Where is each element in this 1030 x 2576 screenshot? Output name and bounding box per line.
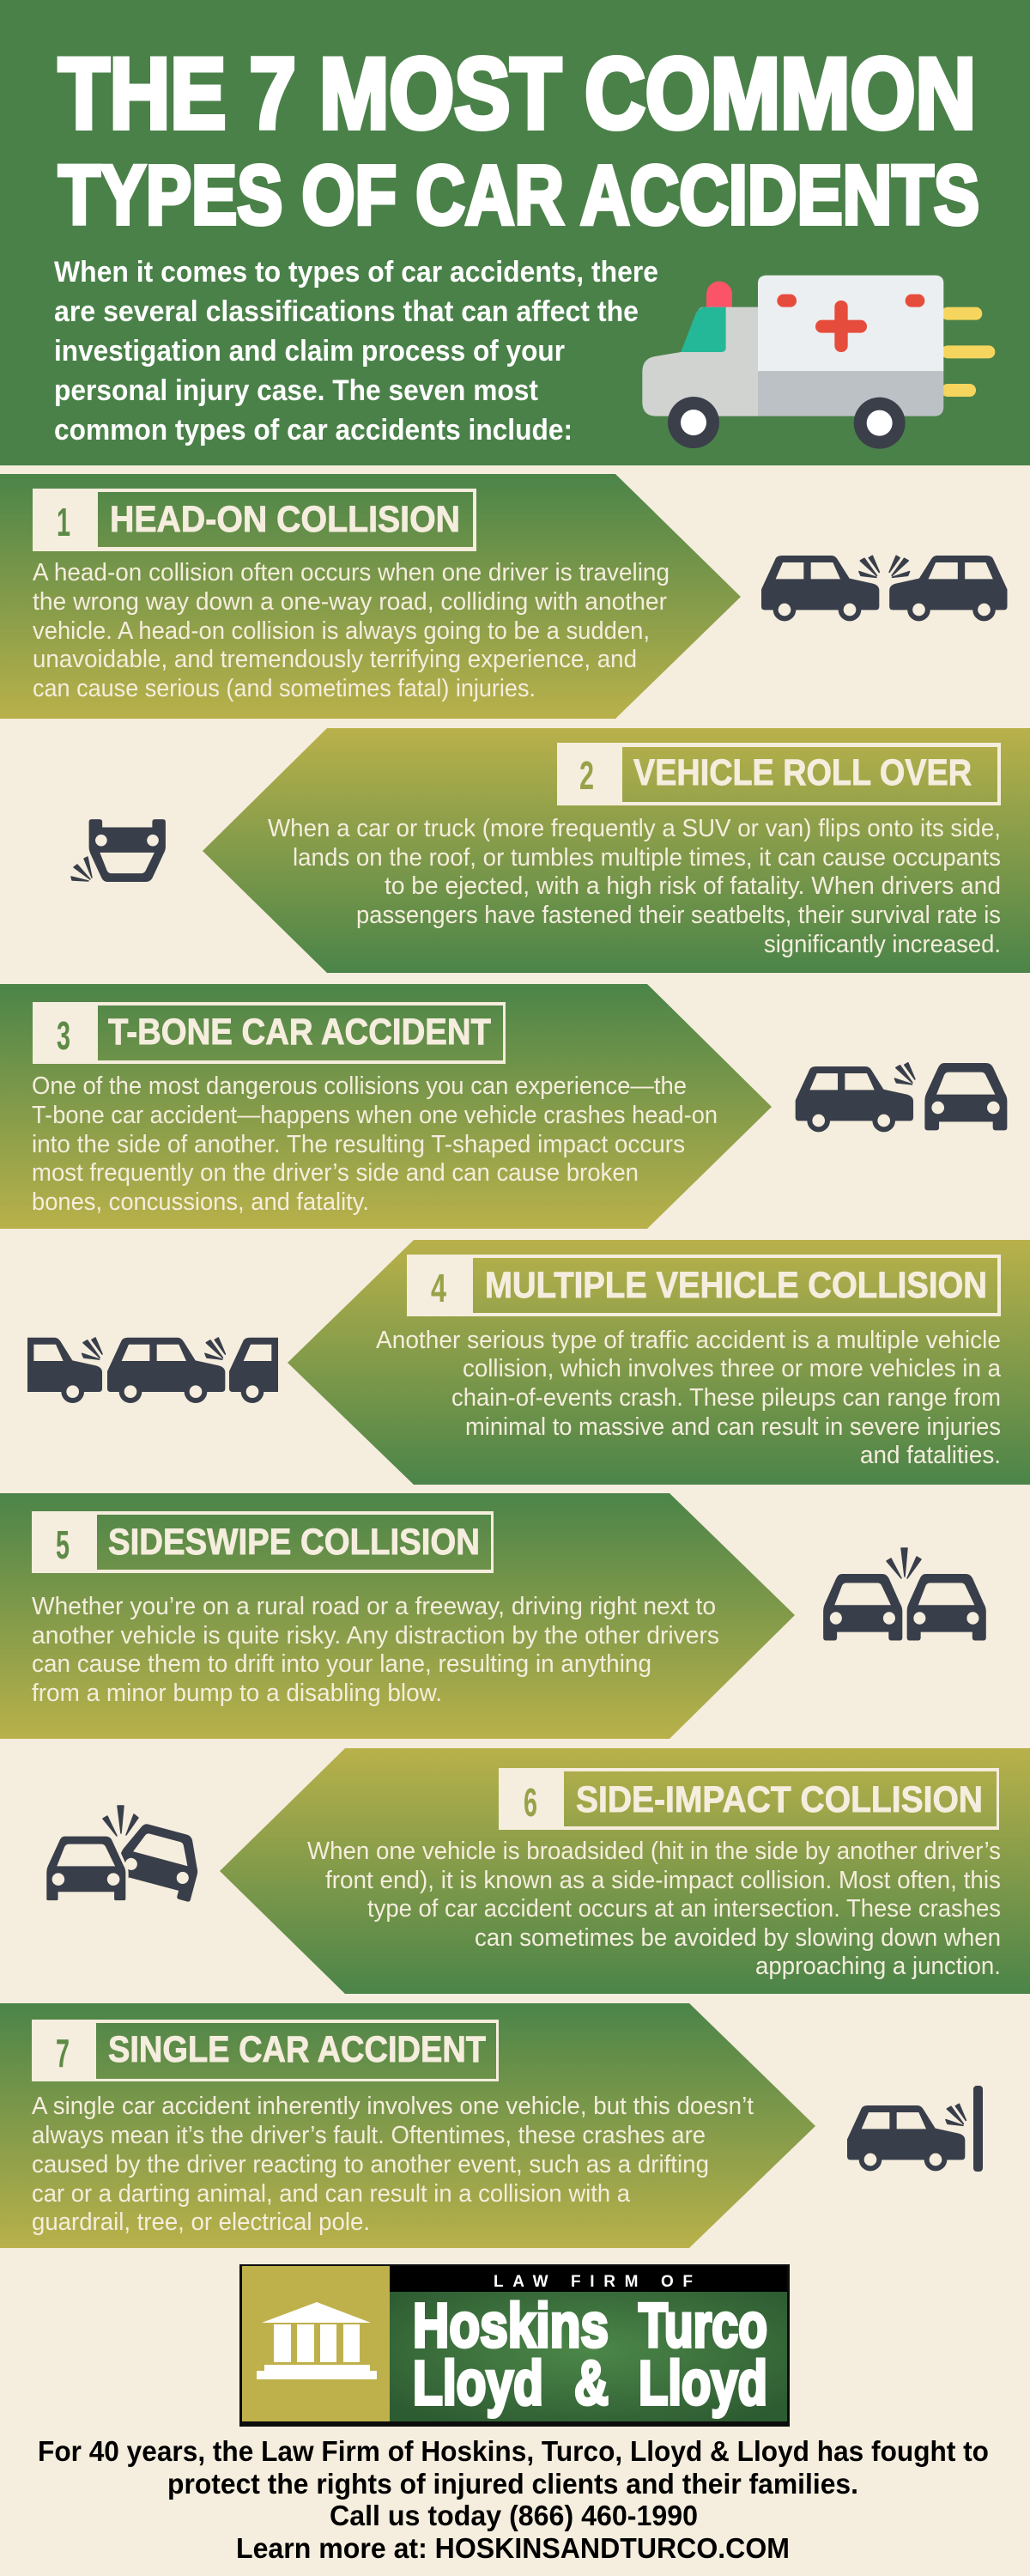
heading box 3 — [33, 1002, 506, 1064]
law firm logo — [239, 2264, 790, 2427]
heading box 5: 5 — [56, 1522, 70, 1567]
intro text: common types of car accidents include: — [54, 414, 573, 447]
heading box 1: 1 — [57, 500, 70, 544]
heading box 1: HEAD-ON COLLISION — [110, 499, 460, 540]
body text 5: Whether you’re on a rural road or a freeway, driving right next to — [32, 1593, 716, 1620]
heading box 5: SIDESWIPE COLLISION — [108, 1522, 480, 1563]
body text 7: car or a darting animal, and can result in a collision with a — [32, 2180, 630, 2208]
footer text: For 40 years, the Law Firm of Hoskins, Turco, Lloyd & Lloyd has fought to — [38, 2435, 989, 2467]
panel 6: side-impact collision — [220, 1748, 1030, 1994]
body text 4 — [376, 1327, 1001, 1469]
logo text: LAW FIRM OF — [494, 2273, 693, 2291]
heading box 3: 3 — [57, 1013, 70, 1058]
footer text: Call us today (866) 460-1990 — [330, 2500, 698, 2531]
body text 5: can cause them to drift into your lane, resulting in anything — [32, 1650, 651, 1678]
body text 3: T-bone car accident—happens when one vehicle crashes head-on — [32, 1102, 718, 1129]
heading box 6: SIDE-IMPACT COLLISION — [576, 1779, 983, 1820]
icon: multi-car pileup — [27, 1337, 278, 1403]
logo text: Hoskins — [413, 2292, 609, 2360]
body text 2 — [268, 815, 1001, 958]
heading box 1 — [33, 489, 476, 551]
panel 3: t-bone car accident — [0, 984, 772, 1229]
logo text — [413, 2273, 767, 2418]
body text 2: passengers have fastened their seatbelts, their survival rate is — [356, 902, 1001, 929]
intro text: When it comes to types of car accidents, there — [54, 256, 658, 289]
body text 4: and fatalities. — [860, 1442, 1001, 1469]
icon: side-impact cars — [45, 1806, 207, 1902]
body text 6: type of car accident occurs at an intersection. These crashes — [367, 1895, 1001, 1923]
footer text: Learn more at: HOSKINSANDTURCO.COM — [236, 2532, 790, 2564]
logo text: Lloyd — [413, 2349, 543, 2418]
logo text: Turco — [639, 2292, 767, 2360]
icon: courthouse pillars — [257, 2302, 377, 2379]
body text 1: unavoidable, and tremendously terrifying experience, and — [33, 646, 637, 673]
body text 6: When one vehicle is broadsided (hit in the side by another driver’s — [307, 1838, 1001, 1865]
body text 3: into the side of another. The resulting T-shaped impact occurs — [32, 1131, 685, 1158]
body text 4: collision, which involves three or more vehicles in a — [463, 1355, 1001, 1382]
body text 3: most frequently on the driver’s side and can cause broken — [32, 1159, 639, 1187]
logo text: Lloyd — [639, 2349, 767, 2418]
body text 7: always mean it’s the driver’s fault. Oftentimes, these crashes are — [32, 2122, 706, 2149]
body text 5 — [32, 1593, 719, 1707]
body text 7: guardrail, tree, or electrical pole. — [32, 2208, 370, 2236]
body text 1: vehicle. A head-on collision is always going to be a sudden, — [33, 617, 650, 645]
panel 7: single car accident — [0, 2003, 815, 2248]
icon: ambulance — [642, 276, 995, 449]
footer text: protect the rights of injured clients and their families. — [167, 2468, 858, 2500]
heading box 3: T-BONE CAR ACCIDENT — [108, 1012, 491, 1053]
heading box 4 — [407, 1255, 1001, 1316]
body text 7: A single car accident inherently involves one vehicle, but this doesn’t — [32, 2093, 754, 2120]
body text 6: can sometimes be avoided by slowing down when — [475, 1924, 1001, 1952]
icon: sideswiping cars — [823, 1548, 986, 1641]
body text 3 — [32, 1072, 718, 1216]
body text 1: can cause serious (and sometimes fatal) injuries. — [33, 675, 536, 702]
body text 6: front end), it is known as a side-impact collision. Most often, this — [325, 1867, 1001, 1894]
heading box 7 — [32, 2020, 499, 2081]
heading box 6: 6 — [524, 1780, 537, 1825]
heading box 5 — [32, 1511, 494, 1573]
intro text: personal injury case. The seven most — [54, 374, 538, 407]
panel 1: head-on collision — [0, 474, 741, 719]
body text 2: to be ejected, with a high risk of fatality. When drivers and — [385, 872, 1001, 900]
heading box 4: 4 — [431, 1266, 446, 1310]
body text 5: another vehicle is quite risky. Any distraction by the other drivers — [32, 1622, 719, 1649]
icon: rolled-over car — [71, 819, 166, 882]
body text 6: approaching a junction. — [755, 1953, 1001, 1980]
intro text: are several classifications that can affect the — [54, 295, 639, 328]
footer text — [38, 2435, 989, 2564]
body text 7 — [32, 2093, 754, 2236]
header band — [0, 0, 1030, 465]
intro text: investigation and claim process of your — [54, 335, 565, 368]
body text 4: Another serious type of traffic accident is a multiple vehicle — [376, 1327, 1001, 1354]
body text 1: the wrong way down a one-way road, colliding with another — [33, 588, 667, 616]
heading box 6 — [499, 1768, 999, 1830]
body text 3: One of the most dangerous collisions you can experience—the — [32, 1072, 687, 1100]
heading box 2: 2 — [579, 753, 594, 798]
body text 3: bones, concussions, and fatality. — [32, 1188, 369, 1216]
body text 4: chain-of-events crash. These pileups can range from — [451, 1384, 1001, 1412]
icon: car hitting pole — [847, 2086, 983, 2172]
body text 1 — [33, 559, 670, 702]
icon: t-bone cars — [796, 1063, 1007, 1132]
panel 5: sideswipe collision — [0, 1493, 795, 1739]
panel 4: multiple vehicle collision — [288, 1240, 1030, 1485]
icon: two cars head-on — [761, 556, 1008, 621]
body text 2: When a car or truck (more frequently a SUV or van) flips onto its side, — [268, 815, 1001, 842]
heading box 2 — [557, 743, 1001, 805]
intro text — [54, 256, 658, 447]
body text 2: lands on the roof, or tumbles multiple times, it can cause occupants — [293, 844, 1001, 872]
heading box 7: SINGLE CAR ACCIDENT — [108, 2029, 486, 2070]
heading box 2: VEHICLE ROLL OVER — [633, 752, 972, 793]
body text 4: minimal to massive and can result in severe injuries — [465, 1413, 1001, 1441]
logo text: & — [574, 2349, 609, 2418]
heading box 7: 7 — [56, 2031, 70, 2075]
body text 2: significantly increased. — [764, 931, 1001, 958]
panel 2: vehicle roll over — [203, 728, 1030, 973]
body text 7: caused by the driver reacting to another event, such as a drifting — [32, 2151, 709, 2178]
body text 5: from a minor bump to a disabling blow. — [32, 1680, 442, 1707]
title — [58, 37, 979, 242]
body text 1: A head-on collision often occurs when one driver is traveling — [33, 559, 670, 586]
body text 6 — [307, 1838, 1001, 1980]
